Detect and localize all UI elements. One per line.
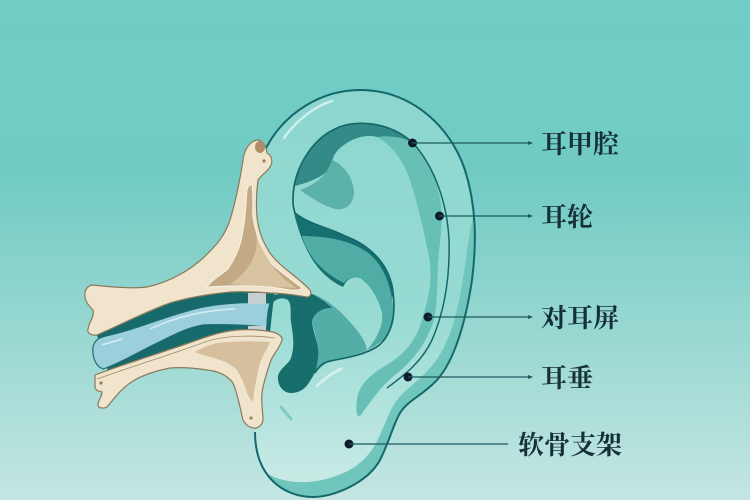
callout: 对耳屏 xyxy=(424,304,619,333)
callout: 耳甲腔 xyxy=(408,130,620,159)
concha deep cavity xyxy=(268,292,332,393)
callout: 软骨支架 xyxy=(344,431,622,460)
callout: 耳甲腔: 耳甲腔 xyxy=(541,130,620,159)
callout: 软骨支架: 软骨支架 xyxy=(518,431,622,460)
ear outline xyxy=(255,90,475,497)
tragus wedge shading xyxy=(300,292,367,372)
lower bone xyxy=(95,330,282,428)
callout: 对耳屏: 对耳屏 xyxy=(541,304,619,333)
callout: 耳垂 xyxy=(404,364,593,393)
upper bone xyxy=(85,140,311,335)
helix inner line xyxy=(387,143,449,388)
dark canal xyxy=(97,288,275,378)
ear illustration xyxy=(255,90,500,500)
ear canal and bones xyxy=(85,140,311,428)
antihelix band xyxy=(356,136,442,416)
callout: 耳轮 xyxy=(435,203,593,232)
highlights xyxy=(284,101,332,138)
callout: 耳轮: 耳轮 xyxy=(541,203,593,232)
concha outline xyxy=(293,123,413,373)
grey connectors xyxy=(248,293,266,304)
outer ear silhouette xyxy=(255,90,475,497)
outer rim shading xyxy=(268,216,474,496)
callout: 耳垂: 耳垂 xyxy=(541,364,593,393)
blue ear canal tube xyxy=(93,303,270,369)
lower fossa cavity xyxy=(294,213,394,350)
upper fossa cavity xyxy=(293,123,413,209)
